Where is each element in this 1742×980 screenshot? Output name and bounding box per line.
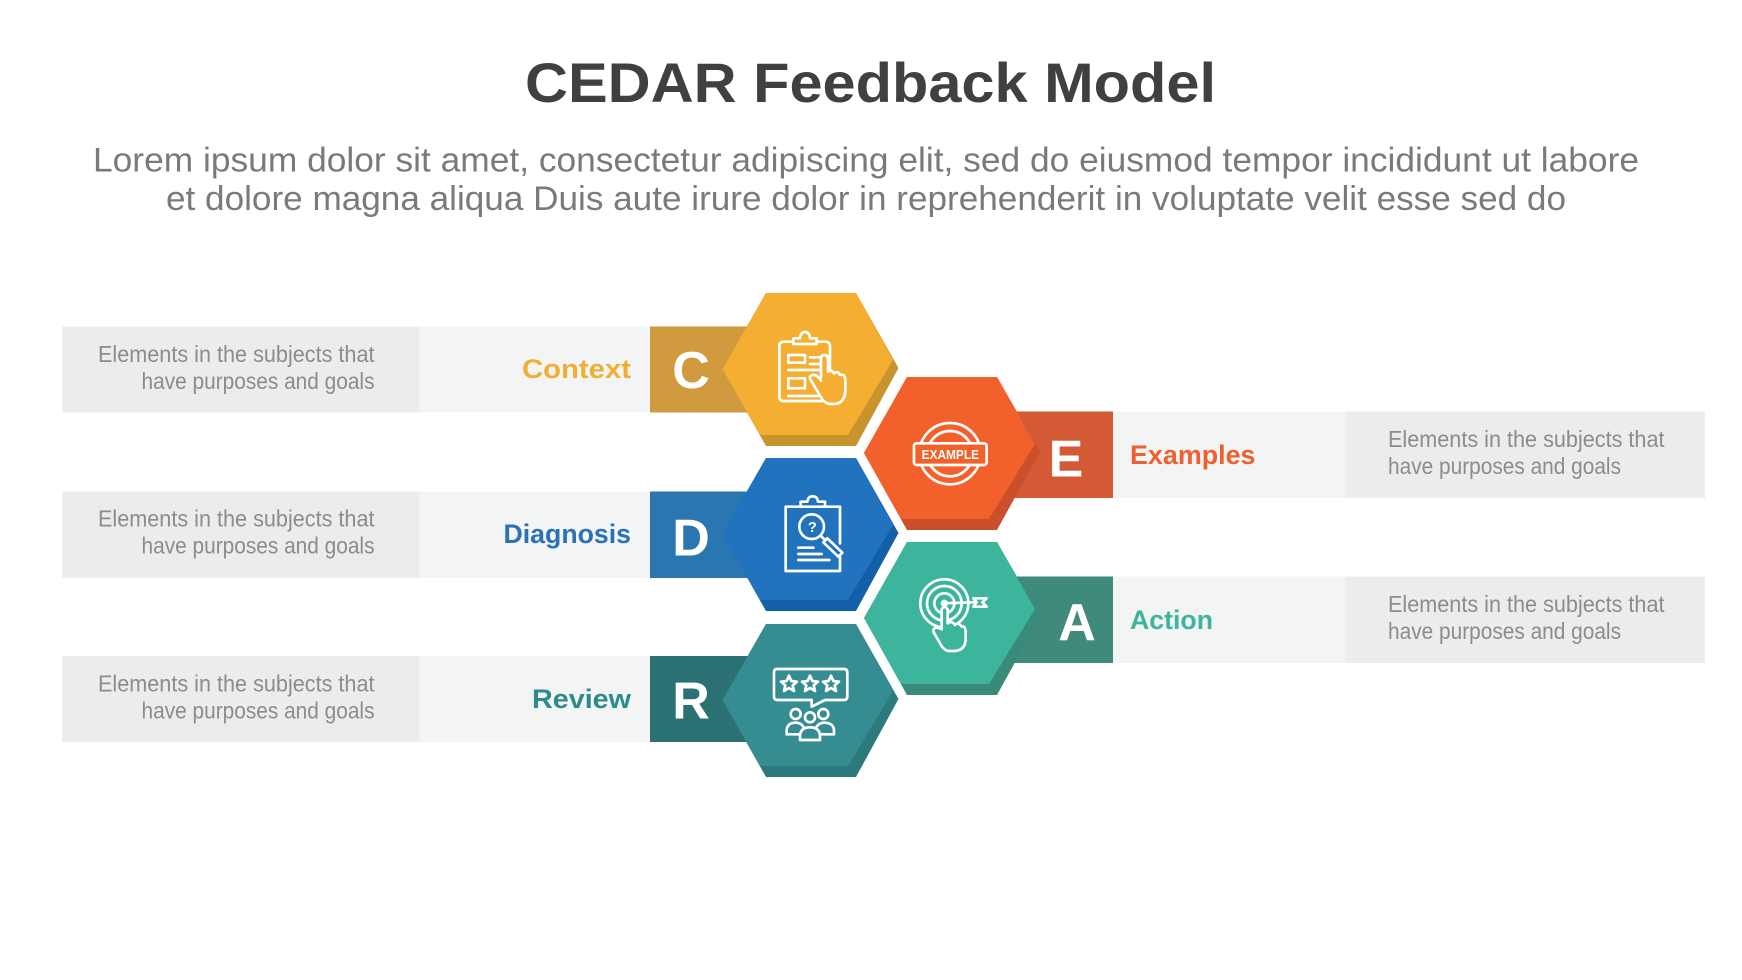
panel: Context [62, 293, 898, 446]
icon: example stamp: EXAMPLE [922, 447, 979, 462]
hexagon: Diagnosis [722, 458, 898, 611]
icon: clipboard with hand [779, 332, 845, 404]
hexagon: Review [722, 624, 898, 777]
hexagon: Examples [864, 377, 1040, 530]
band: D [650, 492, 780, 578]
description: Examples [1388, 426, 1665, 479]
description: Review: Elements in the subjects that [98, 670, 375, 696]
label: Diagnosis: Diagnosis [504, 519, 631, 549]
description: Review [98, 670, 375, 724]
panel: Action [864, 542, 1705, 695]
description: Diagnosis: have purposes and goals [142, 532, 374, 558]
description: Action: have purposes and goals [1388, 618, 1621, 644]
letter: A: A [1058, 594, 1096, 652]
label: Review: Review [532, 684, 632, 714]
hexagon: Action [864, 542, 1040, 695]
description: Examples: Elements in the subjects that [1388, 426, 1665, 452]
icon: example stamp [914, 423, 987, 484]
letter: E: E [1049, 430, 1083, 488]
description: Examples: have purposes and goals [1388, 453, 1621, 479]
subtitle text block: Lorem ipsum dolor sit amet, consectetur adipiscing elit, sed do eiusmod tempor incididunt ut labore [93, 142, 1639, 180]
icon: document with magnifier [786, 496, 842, 571]
icon: target with hand [920, 579, 987, 651]
icon: document with magnifier: ? [808, 520, 817, 536]
band: R [650, 656, 780, 742]
subtitle text block [93, 142, 1639, 218]
description: Diagnosis [98, 506, 375, 558]
panel: Diagnosis [62, 458, 898, 611]
letter: D: D [672, 510, 710, 568]
description: Action: Elements in the subjects that [1388, 591, 1665, 617]
description: Context: Elements in the subjects that [98, 341, 375, 367]
panel: Examples [864, 377, 1705, 530]
label: Context: Context [522, 354, 631, 384]
panel: Review [62, 624, 898, 777]
description: Diagnosis: Elements in the subjects that [98, 506, 375, 532]
label: Action: Action [1130, 605, 1213, 635]
description: Action [1388, 591, 1665, 644]
subtitle text block: et dolore magna aliqua Duis aute irure dolor in reprehenderit in voluptate velit esse sed do [166, 180, 1566, 218]
label: Examples: Examples [1130, 440, 1256, 470]
description: Context: have purposes and goals [142, 368, 374, 394]
description: Context [98, 341, 375, 394]
title: CEDAR Feedback Model [525, 51, 1216, 114]
description: Review: have purposes and goals [142, 698, 374, 724]
icon: star rating with people [774, 669, 847, 740]
band: C [650, 326, 780, 412]
letter: R: R [672, 672, 710, 730]
hexagon: Context [722, 293, 898, 446]
letter: C: C [672, 342, 710, 400]
band: A [960, 576, 1113, 663]
band: E [960, 412, 1113, 498]
